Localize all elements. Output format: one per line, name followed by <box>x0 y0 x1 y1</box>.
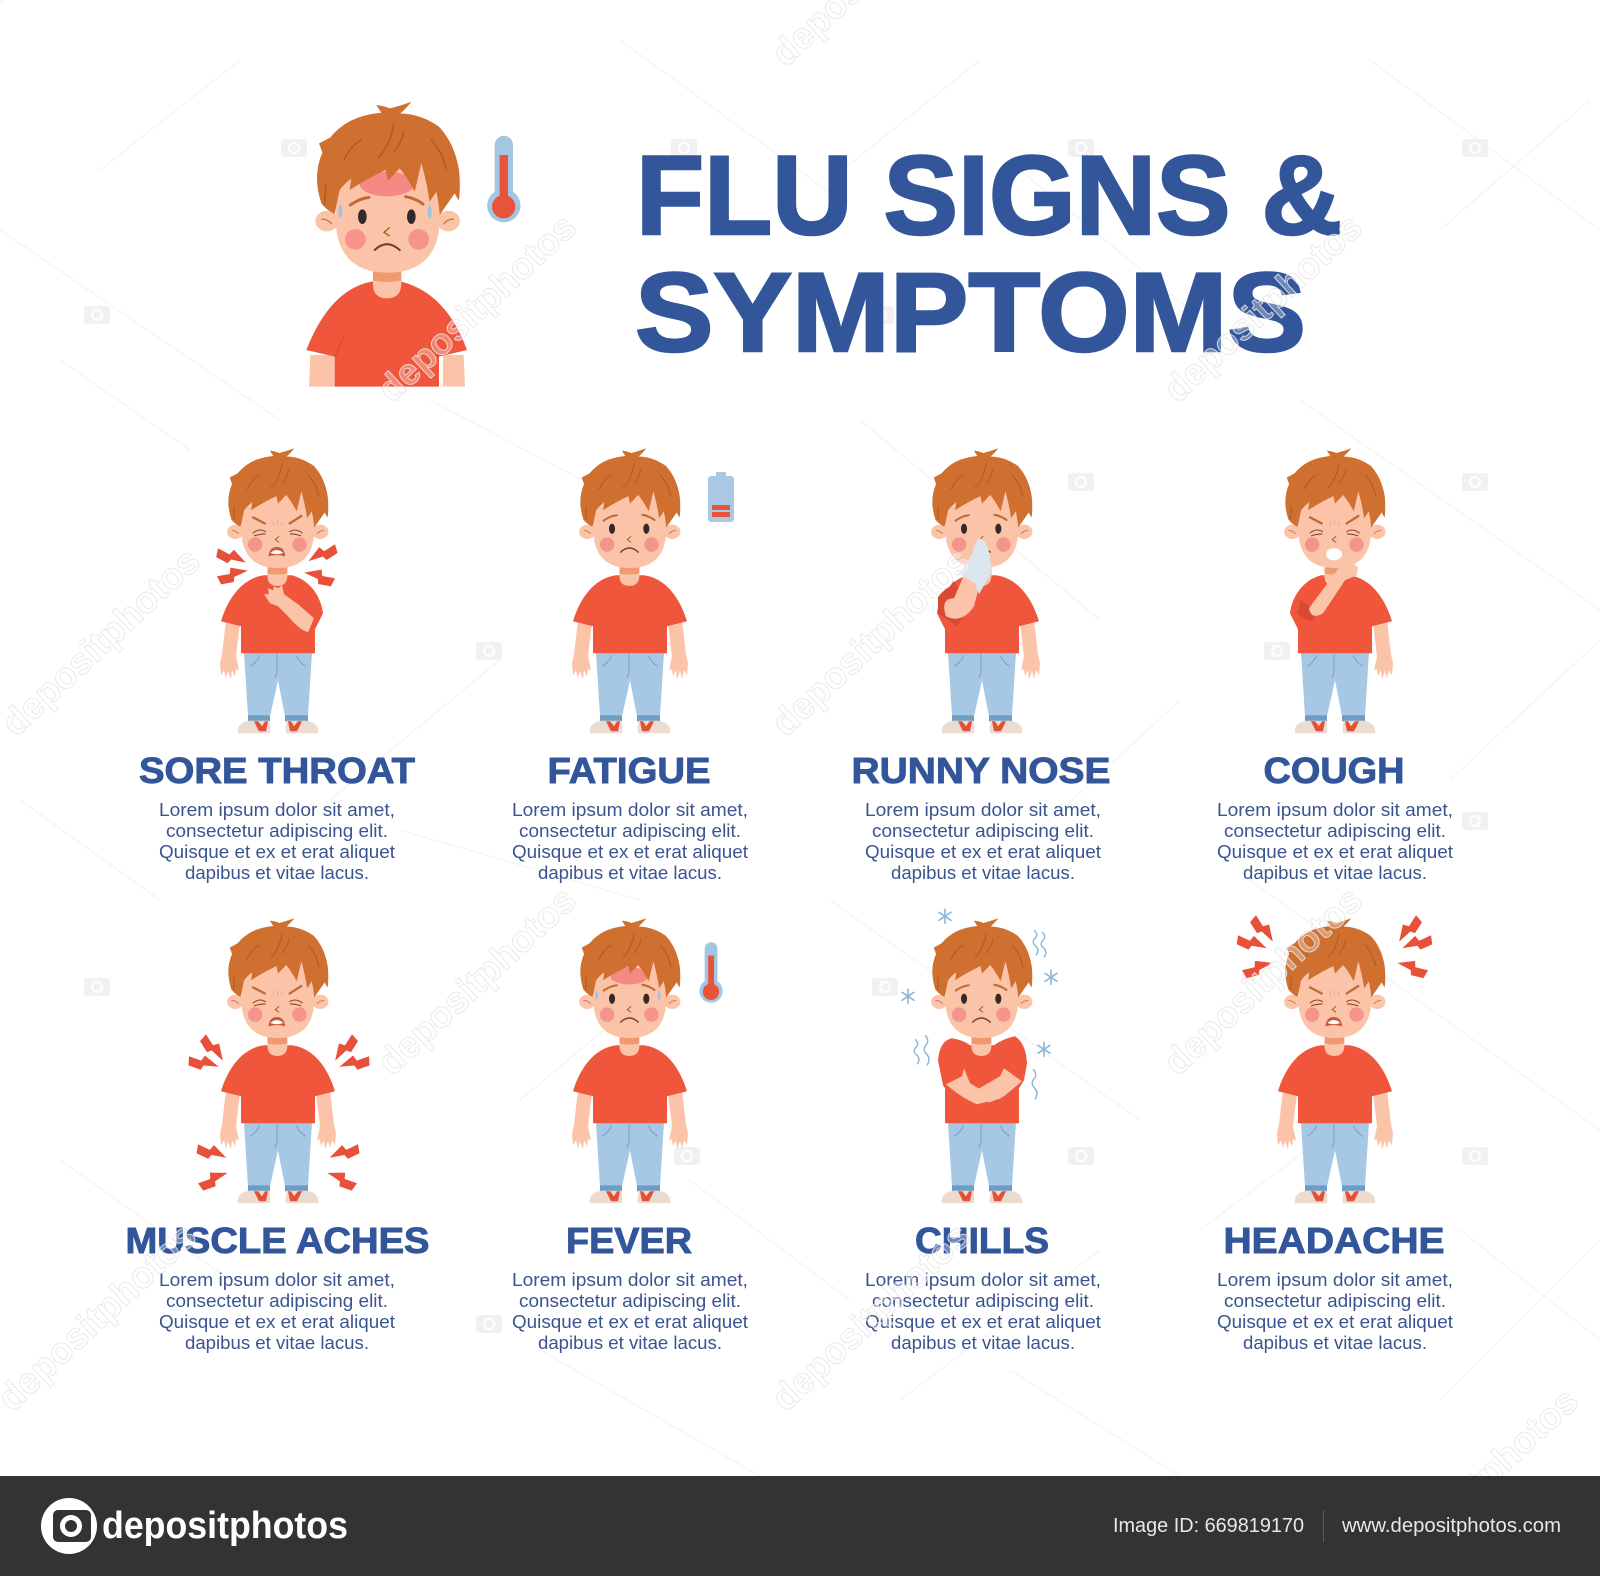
footer bar <box>0 1476 1600 1576</box>
illustration: fatigue boy <box>572 448 688 733</box>
symptom: headache: consectetur adipiscing elit. <box>1224 1290 1446 1311</box>
symptom: fever: Lorem ipsum dolor sit amet, <box>512 1269 748 1290</box>
symptom: fatigue: FATIGUE <box>548 750 710 791</box>
symptom: muscle aches: Lorem ipsum dolor sit amet, <box>159 1269 395 1290</box>
symptom: cough: consectetur adipiscing elit. <box>1224 820 1446 841</box>
symptom: sore throat: Lorem ipsum dolor sit amet, <box>159 799 395 820</box>
symptom: fever: dapibus et vitae lacus. <box>538 1332 722 1353</box>
symptom: sore throat: dapibus et vitae lacus. <box>185 862 369 883</box>
title <box>635 133 1342 375</box>
symptom: sore throat: Quisque et ex et erat aliquet <box>159 841 395 862</box>
symptom: headache: Lorem ipsum dolor sit amet, <box>1217 1269 1453 1290</box>
watermark text overlay: depositphotos <box>369 879 584 1083</box>
illustration: cough boy <box>1284 448 1393 733</box>
symptom: chills <box>865 1220 1101 1353</box>
symptom: runny nose: consectetur adipiscing elit. <box>872 820 1094 841</box>
symptom: sore throat <box>139 750 415 883</box>
symptom: cough <box>1217 750 1453 883</box>
symptom: fever: consectetur adipiscing elit. <box>519 1290 741 1311</box>
symptom: runny nose: Quisque et ex et erat aliquet <box>865 841 1101 862</box>
symptom: muscle aches: Quisque et ex et erat aliquet <box>159 1311 395 1332</box>
footer bar: Image ID: 669819170 <box>1113 1515 1304 1537</box>
symptom: sore throat: consectetur adipiscing elit. <box>166 820 388 841</box>
symptom: fatigue: Quisque et ex et erat aliquet <box>512 841 748 862</box>
symptom: chills: Lorem ipsum dolor sit amet, <box>865 1269 1101 1290</box>
title: FLU SIGNS & <box>636 133 1342 258</box>
symptom: fever: FEVER <box>566 1220 692 1261</box>
symptom: fever <box>512 1220 748 1353</box>
symptom: muscle aches: consectetur adipiscing elit. <box>166 1290 388 1311</box>
watermark text overlay: depositphotos <box>1155 879 1370 1083</box>
illustration: muscle aches boy <box>188 918 370 1203</box>
symptom: fatigue: Lorem ipsum dolor sit amet, <box>512 799 748 820</box>
watermark text overlay: depositphotos <box>763 1215 978 1419</box>
illustration: chills boy <box>902 909 1057 1203</box>
illustration: sore throat boy <box>216 448 338 733</box>
symptom: chills: CHILLS <box>915 1220 1049 1261</box>
watermark text overlay: depositphotos <box>1155 206 1370 410</box>
symptom: sore throat: SORE THROAT <box>139 750 415 791</box>
symptom: muscle aches <box>126 1220 430 1353</box>
illustration: fever boy with thermometer <box>572 918 723 1203</box>
symptom: muscle aches: dapibus et vitae lacus. <box>185 1332 369 1353</box>
watermark text overlay: depositphotos <box>369 206 584 410</box>
footer bar: depositphotos <box>102 1505 348 1547</box>
symptom: cough: COUGH <box>1264 750 1404 791</box>
symptom: runny nose <box>852 750 1110 883</box>
symptom: headache <box>1217 1220 1453 1353</box>
icon: low battery <box>708 472 734 522</box>
illustration: runny nose boy <box>931 448 1040 733</box>
symptom: cough: Quisque et ex et erat aliquet <box>1217 841 1453 862</box>
symptom: fever: Quisque et ex et erat aliquet <box>512 1311 748 1332</box>
main boy with fever and thermometer <box>306 102 520 387</box>
symptom: fatigue <box>512 750 748 883</box>
symptom: muscle aches: MUSCLE ACHES <box>126 1220 430 1261</box>
symptom: runny nose: RUNNY NOSE <box>852 750 1110 791</box>
symptom: cough: Lorem ipsum dolor sit amet, <box>1217 799 1453 820</box>
symptom: chills: dapibus et vitae lacus. <box>891 1332 1075 1353</box>
symptom: runny nose: Lorem ipsum dolor sit amet, <box>865 799 1101 820</box>
symptom: chills: consectetur adipiscing elit. <box>872 1290 1094 1311</box>
symptom: chills: Quisque et ex et erat aliquet <box>865 1311 1101 1332</box>
symptom: cough: dapibus et vitae lacus. <box>1243 862 1427 883</box>
symptom: fatigue: consectetur adipiscing elit. <box>519 820 741 841</box>
footer bar: www.depositphotos.com <box>1341 1515 1561 1537</box>
symptom: runny nose: dapibus et vitae lacus. <box>891 862 1075 883</box>
icon: depositphotos logo <box>41 1498 97 1554</box>
symptom: headache: dapibus et vitae lacus. <box>1243 1332 1427 1353</box>
watermark text overlay: depositphotos <box>763 540 978 744</box>
illustration: headache boy <box>1237 915 1432 1203</box>
title: SYMPTOMS <box>635 250 1306 375</box>
symptom: fatigue: dapibus et vitae lacus. <box>538 862 722 883</box>
symptom: headache: HEADACHE <box>1224 1220 1444 1261</box>
symptom: headache: Quisque et ex et erat aliquet <box>1217 1311 1453 1332</box>
